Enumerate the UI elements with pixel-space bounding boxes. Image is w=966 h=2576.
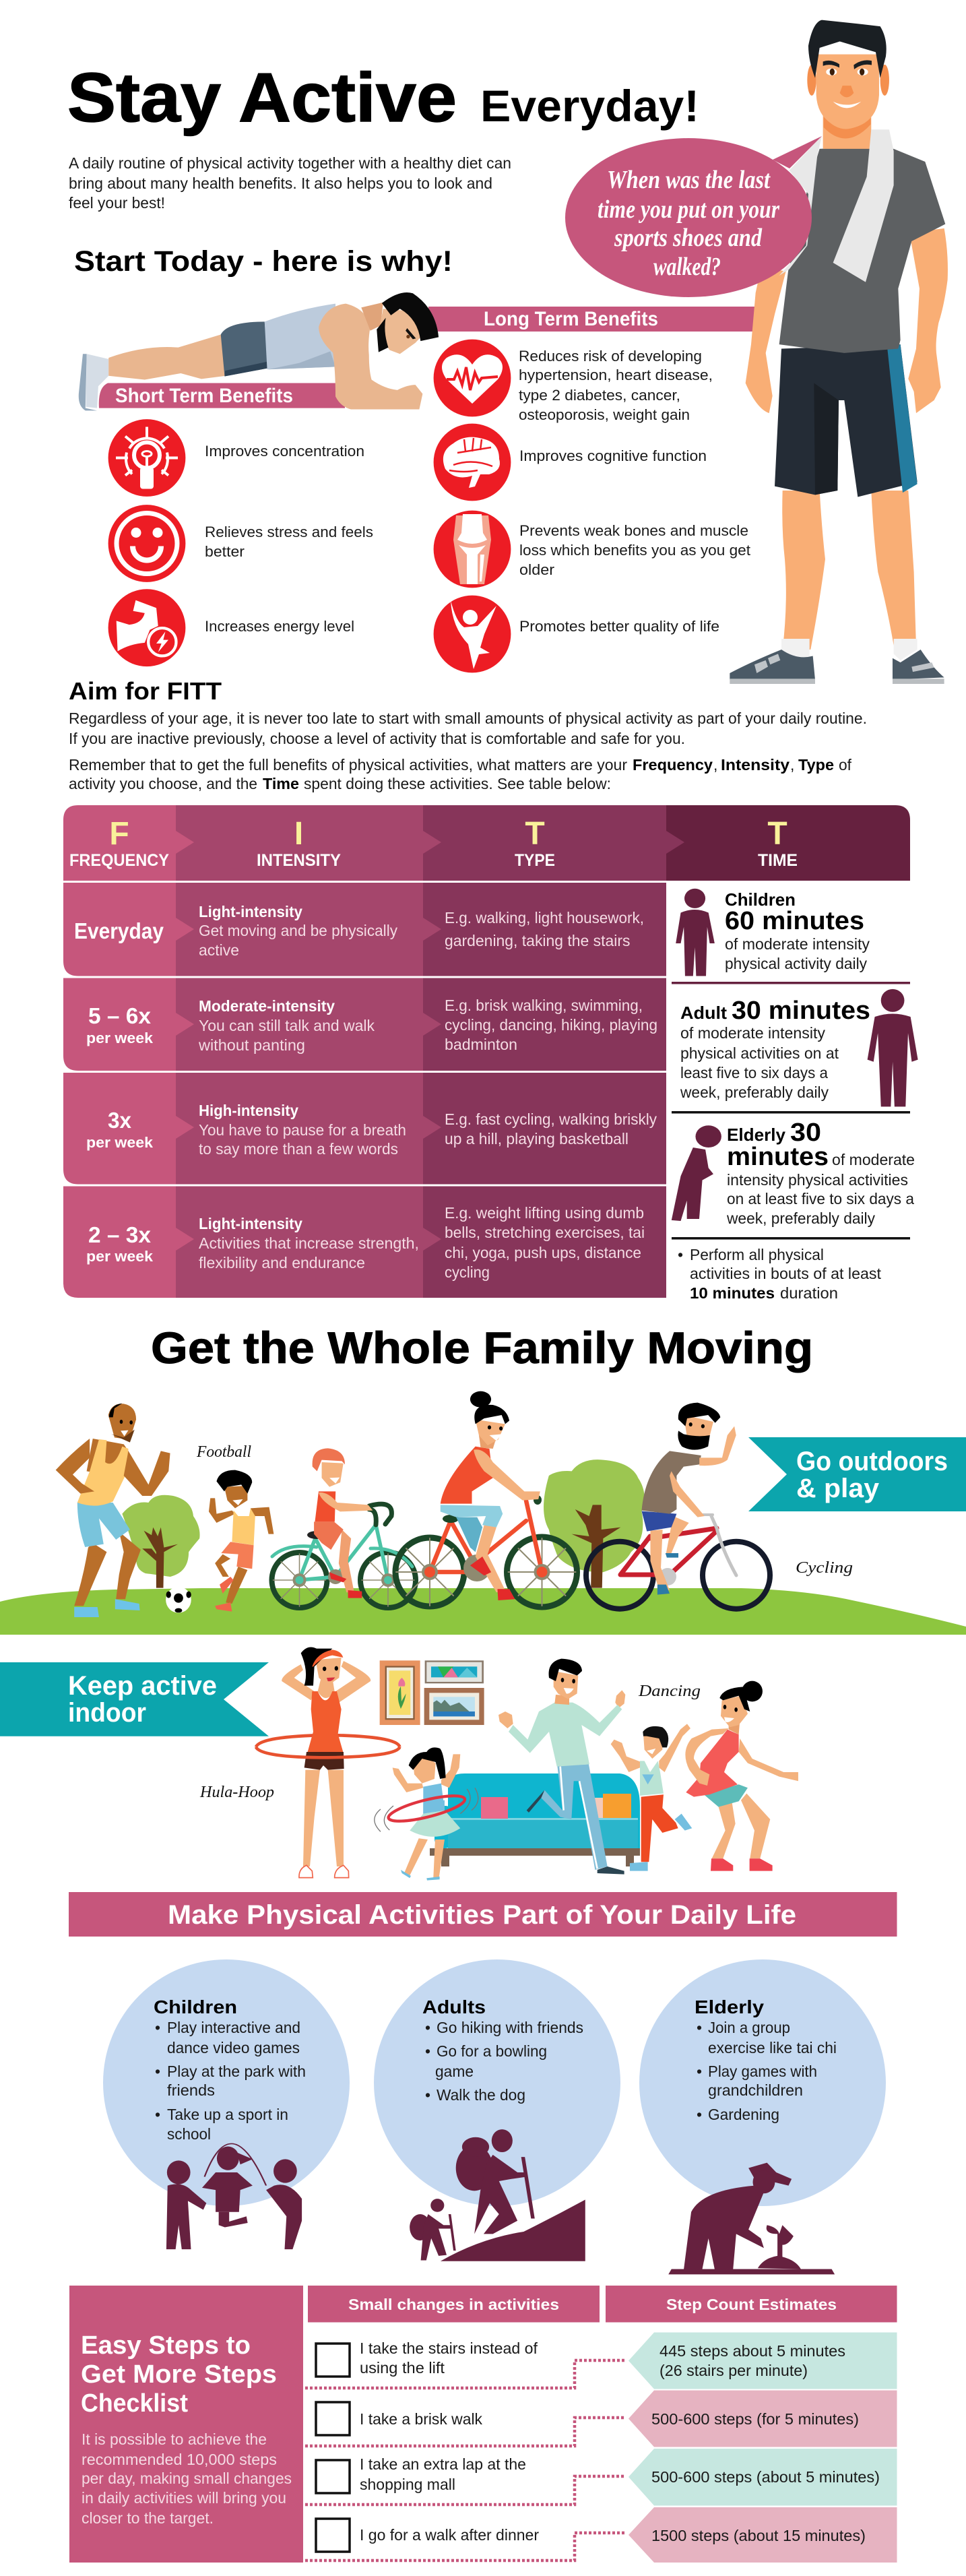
time column: children: 60 minutes [725,907,864,935]
illustration: man doing plank [79,292,439,410]
row: 3x per week: E.g. fast cycling, walking briskly [445,1110,657,1128]
row: 2-3x per week: bells, stretching exercises, tai [445,1224,645,1241]
header: step count estimates [606,2286,897,2322]
long term benefit text: Prevents weak bones and muscle [519,522,748,539]
panel: elderly activities: • [697,2019,702,2036]
panel: adults activities: • [425,2019,430,2036]
long term benefit text: Reduces risk of developing [519,348,702,365]
label: hula-hoop: Hula-Hoop [199,1784,274,1801]
checklist items: I go for a walk after dinner [360,2526,539,2544]
FITT intro paragraphs: Regardless of your age, it is never too late to start with small amounts of physical activity as part of your daily routine. [69,710,867,727]
row: 3x per week: High-intensity [199,1102,298,1119]
panel: children activities: • [155,2106,160,2123]
icon: jumping figure [434,596,511,672]
illustration: boy dancing [611,1724,692,1871]
FITT intro paragraphs: , [713,756,717,774]
row: 2-3x per week: chi, yoga, push ups, distance [445,1244,641,1261]
row: 2-3x per week: Activities that increase strength, [199,1234,419,1252]
banner: go outdoors and play: & play [796,1474,880,1503]
short term benefit text: Improves concentration [205,443,364,460]
row: 3x per week: You have to pause for a breath [199,1121,406,1139]
label: football: Football [196,1443,251,1461]
long term benefit text [519,348,750,635]
checklist items: I take an extra lap at the [360,2455,526,2473]
panel: children activities: Take up a sport in [167,2106,288,2123]
row: 2-3x per week: flexibility and endurance [199,1254,365,1271]
illustration: mother dancing [685,1681,798,1871]
step estimate: stairs: 445 steps about 5 minutes [659,2342,845,2360]
time column: duration note [678,1246,882,1302]
panel: elderly activities: grandchildren [708,2081,803,2099]
illustration: girl with hula hoop [375,1747,478,1881]
outdoor ground [0,1588,966,1635]
row: 2-3x per week: Light-intensity [199,1215,302,1232]
step estimate: extra lap [629,2449,897,2505]
time column: duration note: 10 minutes [690,1284,775,1302]
table header row: T [767,816,787,852]
banner: go outdoors and play [748,1437,966,1511]
panel: children activities: • [155,2019,160,2036]
icon: hikers on hill [410,2129,585,2261]
step estimate: extra lap: 500-600 steps (about 5 minutes) [651,2468,880,2486]
time column: duration note: activities in bouts of at least [690,1265,882,1282]
FITT intro paragraphs: activity you choose, and the [69,775,257,792]
illustration: father dancing [498,1659,625,1875]
row: 5-6x per week: per week [86,1030,154,1046]
icon: children skipping rope [166,2143,302,2249]
checklist items: I take the stairs instead of [360,2339,538,2357]
panel: adults activities: Walk the dog [437,2086,525,2104]
row: everyday: E.g. walking, light housework, [445,909,644,926]
short term benefit text: Increases energy level [205,618,354,635]
label: dancing: Dancing [638,1683,701,1700]
checklist items: I take a brisk walk [360,2410,482,2428]
short term benefit text [205,443,373,635]
banner: long term benefits: Long Term Benefits [484,308,658,330]
table header row: FREQUENCY [69,851,169,870]
time column: elderly: intensity physical activities [727,1171,908,1189]
time column: elderly: Elderly [727,1125,786,1145]
table header row [63,805,910,881]
panel: elderly activities [639,1959,886,2274]
panel: easy steps checklist: closer to the target. [82,2509,214,2527]
row: 2-3x per week: cycling [445,1263,490,1281]
tree right [544,1459,645,1588]
intro paragraph: A daily routine of physical activity together with a healthy diet can [69,154,511,172]
short term benefit text: better [205,543,245,560]
time column: elderly: minutes [727,1143,829,1171]
table header row: TIME [758,851,798,870]
title: Stay Active [67,59,457,136]
illustration: father on bicycle [586,1403,770,1609]
panel: easy steps checklist: Easy Steps to [81,2331,251,2360]
time column: duration note: duration [780,1284,838,1302]
panel: elderly activities: • [697,2063,702,2080]
time column: adult [680,989,918,1106]
icon: heart [434,340,511,416]
row: 3x per week: 3x [108,1108,132,1133]
banner: long term benefits [428,307,759,332]
panel: adults activities: • [425,2042,430,2060]
speech bubble: time you put on your [598,195,780,224]
long term benefit text: Promotes better quality of life [519,618,719,635]
row: everyday: active [199,941,239,959]
row: 2-3x per week: per week [86,1248,154,1265]
time column: duration note: • [678,1246,683,1263]
panel: children activities [103,1959,350,2249]
time column: elderly: on at least five to six days a [727,1190,914,1207]
speech bubble [565,136,822,297]
banner: keep active indoor: Keep active [68,1671,217,1701]
icon: muscle energy [108,589,185,666]
time column: duration note: Perform all physical [690,1246,824,1263]
row: 3x per week: per week [86,1134,154,1151]
row: 5-6x per week: 5 – 6x [88,1003,152,1028]
long term benefit text: hypertension, heart disease, [519,367,713,383]
panel: elderly activities: Gardening [708,2106,779,2123]
FITT intro paragraphs: Intensity [721,756,790,774]
long term benefit text: Improves cognitive function [519,447,707,464]
banner: keep active indoor: indoor [68,1698,146,1728]
time column: elderly [672,1119,915,1227]
panel: children activities: Play at the park with [167,2063,306,2080]
step estimate: walk after dinner [629,2507,897,2563]
label: cycling: Cycling [796,1559,853,1577]
banner: short term benefits [99,383,345,408]
tree left [122,1495,200,1588]
row: 5-6x per week: badminton [445,1036,517,1053]
checklist items [316,2339,539,2552]
speech bubble: walked? [653,253,721,281]
time column: adult: Adult [680,1003,727,1023]
banner: short term benefits: Short Term Benefits [115,385,293,407]
row: everyday: gardening, taking the stairs [445,932,631,949]
time column: elderly: 30 [790,1119,821,1147]
panel: elderly activities: Play games with [708,2063,817,2080]
time column: children [676,889,870,976]
speech bubble: sports shoes and [614,224,763,252]
sofa [430,1773,640,1866]
row: 3x per week: to say more than a few words [199,1140,398,1158]
table header row: T [525,816,545,852]
row: 2-3x per week [63,1186,666,1298]
intro paragraph: bring about many health benefits. It also helps you to look and [69,175,492,192]
short term benefit text: Relieves stress and feels [205,524,373,540]
header: small changes in activities: Small changes in activities [348,2296,559,2313]
step estimate: stairs: (26 stairs per minute) [659,2362,808,2379]
heading: get the whole family moving: Get the Whole Family Moving [151,1323,813,1373]
row: everyday: Everyday [74,918,164,943]
illustration: woman with hula hoop [256,1647,399,1878]
header: small changes in activities [308,2286,600,2322]
panel: adults activities: • [425,2086,430,2104]
illustration: standing man with towel [730,20,948,684]
panel: easy steps checklist: Get More Steps [81,2360,277,2389]
illustration: father and son football [56,1404,273,1617]
heading: aim for FITT: Aim for FITT [69,677,222,705]
long term benefit text: loss which benefits you as you get [519,542,750,559]
FITT intro paragraphs: Frequency [633,756,713,774]
panel: easy steps checklist [69,2286,303,2563]
banner: make physical activities part of your daily life [69,1892,897,1937]
panel: easy steps checklist: recommended 10,000 steps [82,2451,277,2468]
row: 5-6x per week: E.g. brisk walking, swimming, [445,997,643,1014]
panel: adults activities: Go hiking with friends [437,2019,583,2036]
FITT intro paragraphs: If you are inactive previously, choose a level of activity that is comfortable and safe for you. [69,730,685,747]
panel: elderly activities: Join a group [708,2019,790,2036]
icon: elderly gardener [668,2163,835,2274]
row: 2-3x per week: 2 – 3x [88,1222,152,1247]
row: 5-6x per week: cycling, dancing, hiking, playing [445,1016,657,1034]
intro paragraph: feel your best! [69,194,165,212]
table header row: INTENSITY [257,851,341,870]
long term benefit text: type 2 diabetes, cancer, [519,387,680,404]
dotted connectors [305,2360,625,2561]
row: 3x per week: up a hill, playing basketball [445,1130,629,1148]
table header row: TYPE [515,851,555,870]
wall pictures [380,1660,484,1725]
checklist items: shopping mall [360,2476,455,2493]
time column: adult: week, preferably daily [680,1083,829,1101]
time column: adult: of moderate intensity [680,1024,825,1042]
time column: children: Children [725,889,796,910]
panel: adults activities: Go for a bowling [437,2042,547,2060]
icon: smiley stress relief [108,505,185,582]
step estimate: walk after dinner: 1500 steps (about 15 minutes) [651,2527,866,2544]
panel: easy steps checklist: in daily activities will bring you [82,2489,286,2507]
time column: elderly: of moderate [832,1151,915,1168]
FITT intro paragraphs [69,710,867,792]
panel: children activities: school [167,2125,211,2143]
banner: make physical activities part of your daily life: Make Physical Activities Part of Your Daily Life [168,1900,796,1930]
title [67,59,699,136]
illustration: mother on bicycle [395,1391,577,1607]
FITT intro paragraphs: of [839,756,852,774]
title: Everyday! [480,81,699,131]
FITT intro paragraphs: Time [263,775,299,792]
step estimate: stairs [629,2333,897,2389]
panel: easy steps checklist: It is possible to achieve the [82,2430,267,2448]
FITT intro paragraphs: Remember that to get the full benefits of physical activities, what matters are your [69,756,627,774]
panel: elderly activities: Elderly [695,1997,764,2017]
checklist items: using the lift [360,2359,445,2377]
row: everyday: Get moving and be physically [199,922,397,939]
illustration: kid on bicycle [272,1448,416,1608]
long term benefit text: osteoporosis, weight gain [519,406,690,423]
table header row: I [294,816,303,852]
icon: light bulb concentration [108,419,185,497]
speech bubble: When was the last [607,166,771,194]
time column: elderly: week, preferably daily [726,1210,875,1227]
time column: children: physical activity daily [725,955,867,972]
long term benefit text: older [519,561,554,578]
panel: adults activities: game [435,2063,474,2080]
row: 5-6x per week: Moderate-intensity [199,997,335,1015]
time column: adult: physical activities on at [680,1044,839,1062]
panel: adults activities: Adults [422,1997,486,2017]
FITT intro paragraphs: Type [798,756,834,774]
banner: go outdoors and play: Go outdoors [796,1447,948,1476]
heading: start today: Start Today - here is why! [74,245,453,278]
panel: elderly activities: exercise like tai chi [708,2039,837,2056]
row: everyday [63,883,666,976]
panel: adults activities [374,1959,620,2261]
panel: easy steps checklist: Checklist [81,2389,188,2418]
icon: knee bones [434,511,511,588]
row: 5-6x per week [63,978,666,1071]
row: 5-6x per week: without panting [198,1036,305,1054]
time column: adult: least five to six days a [680,1064,828,1081]
time column: adult: 30 minutes [732,997,870,1025]
table header row: F [109,816,129,852]
row: everyday: Light-intensity [199,903,302,920]
time column: children: of moderate intensity [725,935,870,953]
FITT intro paragraphs: spent doing these activities. See table below: [304,775,611,792]
panel: children activities: • [155,2063,160,2080]
step estimate: brisk walk [629,2391,897,2447]
panel: elderly activities: • [697,2106,702,2123]
step estimate: brisk walk: 500-600 steps (for 5 minutes) [651,2410,859,2428]
intro paragraph [69,154,511,212]
row: 5-6x per week: You can still talk and walk [199,1017,375,1034]
panel: easy steps checklist: per day, making small changes [82,2470,292,2487]
header: step count estimates: Step Count Estimates [666,2296,837,2313]
panel: children activities: dance video games [167,2039,300,2056]
row: 2-3x per week: E.g. weight lifting using dumb [445,1204,644,1222]
FITT intro paragraphs: , [790,756,794,774]
panel: children activities: Children [154,1997,237,2017]
banner: keep active indoor [0,1662,269,1736]
panel: children activities: Play interactive and [167,2019,300,2036]
icon: brain [434,424,511,501]
row: 3x per week [63,1073,666,1185]
FITT table [63,805,910,1298]
panel: children activities: friends [167,2081,215,2099]
